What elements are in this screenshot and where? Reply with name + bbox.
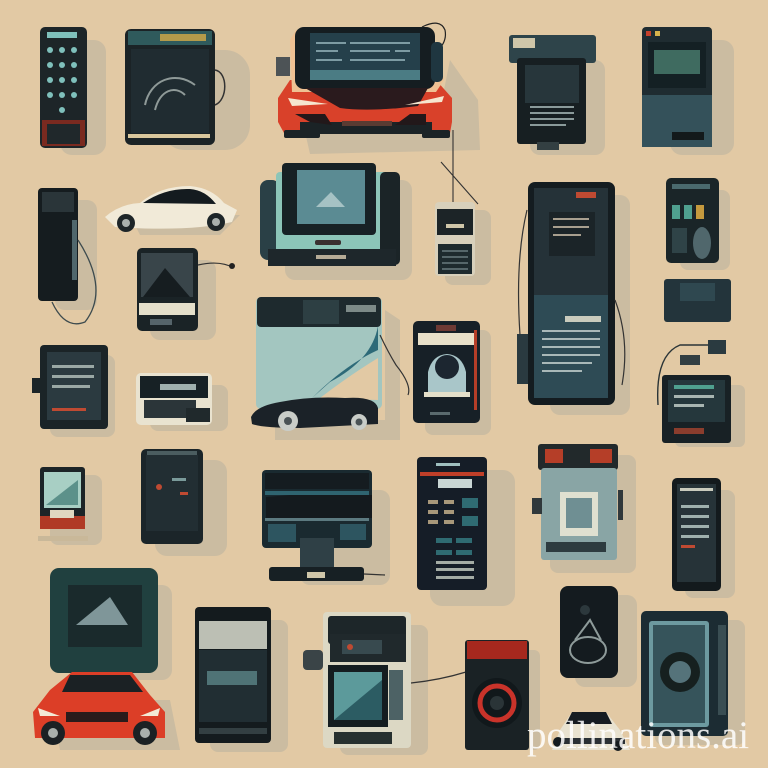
device: teal monitor <box>50 568 158 673</box>
device: dark tablet <box>141 449 203 544</box>
device: remote <box>40 27 87 148</box>
device: printer terminal <box>509 35 596 150</box>
device: small scanner <box>136 373 212 425</box>
device: handheld black <box>38 188 96 324</box>
device: camera unit <box>413 321 480 423</box>
device: dashboard small <box>137 248 235 331</box>
device: grey machine <box>532 444 623 560</box>
device: small radio <box>435 130 478 276</box>
device: tablet with swirl <box>125 29 225 145</box>
device: monitor teal <box>260 163 400 266</box>
car: partial bottom <box>552 712 630 751</box>
car: red with screen <box>276 23 452 138</box>
car: white sedan <box>105 186 237 232</box>
car: red SUV <box>33 672 165 745</box>
device: washer unit <box>641 611 728 736</box>
device: small control panel <box>666 178 719 263</box>
device: flat box <box>664 279 731 322</box>
device: tablet bottom <box>195 607 271 743</box>
device: red speaker <box>465 640 529 750</box>
device: rounded dark speaker <box>560 586 618 678</box>
device: retro camera <box>303 612 466 748</box>
device: control with cable <box>658 340 731 443</box>
device: large printer with black car <box>251 297 409 431</box>
device: keypad panel <box>417 457 487 590</box>
device: tall tower <box>517 182 625 405</box>
device: console top right <box>642 27 712 147</box>
watermark: pollinations.ai <box>527 714 749 757</box>
device: slim phone <box>672 478 721 591</box>
device: desktop printer <box>262 470 385 581</box>
device: small photo frame <box>38 467 88 541</box>
device: tablet left row 3 <box>32 345 108 429</box>
